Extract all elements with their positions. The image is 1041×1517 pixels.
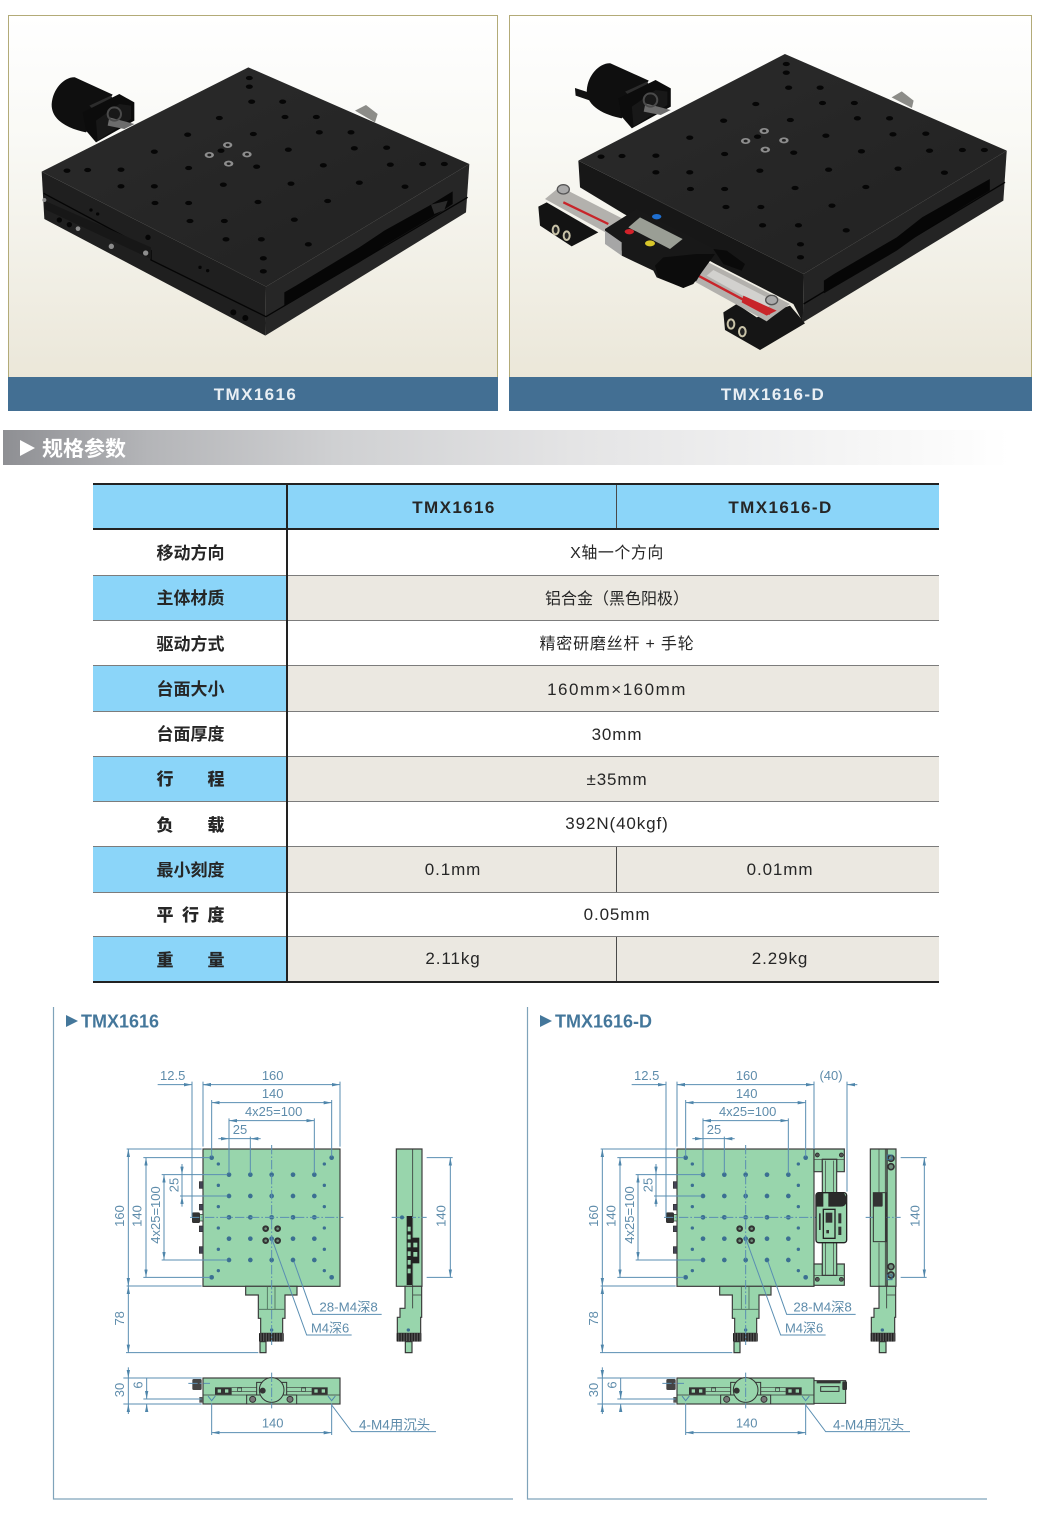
row: 最小刻度: 0.1mm (425, 860, 481, 879)
row: 台面厚度: 30mm (592, 725, 642, 744)
technical drawing: TMX1616: 6 (130, 1381, 145, 1389)
row: 最小刻度: 最小刻度 (156, 861, 224, 880)
technical drawing: TMX1616-D: 160 (586, 1205, 601, 1227)
technical drawing: TMX1616-D: (40) (819, 1068, 843, 1083)
row: 最小刻度 (93, 847, 939, 892)
spec table (93, 483, 939, 983)
technical drawing: TMX1616-D: 4-M4用沉头 (833, 1418, 904, 1433)
row: 行程 (93, 756, 939, 802)
technical drawing: TMX1616-D: 25 (640, 1178, 655, 1192)
row: 重量: 2.29kg (752, 948, 808, 968)
technical drawing: TMX1616-D (586, 1068, 927, 1435)
caption: TMX1616-D (509, 377, 1032, 411)
row: 行程: 程 (208, 770, 224, 789)
row: 行程: 行 (156, 770, 174, 789)
row: 重量: 量 (208, 950, 224, 970)
technical drawing: TMX1616: 25 (233, 1122, 247, 1137)
product illustration: TMX1616 stage (42, 67, 470, 336)
row: 平行度 (93, 892, 939, 937)
technical drawing: TMX1616-D: 30 (586, 1383, 601, 1397)
row: 台面大小: 台面大小 (156, 680, 224, 699)
row: 主体材质: 铝合金（黑色阳极） (545, 591, 689, 608)
heading: TMX1616-D: TMX1616-D (555, 1012, 652, 1032)
row: 台面大小: 160mm×160mm (547, 680, 687, 699)
panel: TMX1616-D dimension drawing (526, 1007, 987, 1500)
caption: TMX1616: TMX1616 (214, 385, 297, 404)
technical drawing: TMX1616: 140 (262, 1086, 284, 1101)
technical drawing: TMX1616: 78 (112, 1311, 127, 1326)
row: 平行度: 行 (182, 906, 199, 925)
row: 台面厚度 (93, 712, 939, 756)
technical drawing: TMX1616: 140 (262, 1416, 284, 1431)
row: 重量: 2.11kg (425, 948, 481, 968)
row: 负载: 392N(40kgf) (565, 814, 669, 832)
table header: TMX1616-D (728, 498, 833, 517)
technical drawing: TMX1616-D: 28-M4深8 (793, 1300, 852, 1315)
table header (93, 483, 939, 530)
row: 负载 (93, 802, 939, 847)
technical drawing: TMX1616-D: 6 (604, 1381, 619, 1389)
row: 驱动方式: 驱动方式 (156, 634, 224, 654)
row: 台面厚度: 台面厚度 (156, 725, 224, 744)
technical drawing: TMX1616: 140 (130, 1205, 145, 1227)
row: 平行度: 0.05mm (584, 905, 650, 924)
technical drawing: TMX1616: 4-M4用沉头 (359, 1418, 430, 1433)
technical drawing: TMX1616: 12.5 (160, 1068, 185, 1083)
technical drawing: TMX1616-D: M4深6 (785, 1321, 823, 1336)
row: 移动方向 (93, 530, 939, 576)
row: 负载: 载 (208, 816, 224, 834)
technical drawing: TMX1616: 160 (112, 1205, 127, 1227)
row: 主体材质: 主体材质 (156, 589, 224, 608)
row: 行程: ±35mm (586, 770, 648, 789)
row: 平行度: 平 (156, 906, 174, 925)
technical drawing: TMX1616-D: 12.5 (634, 1068, 659, 1083)
technical drawing: TMX1616: M4深6 (311, 1321, 349, 1336)
row: 重量 (93, 937, 939, 983)
row: 驱动方式: 精密研磨丝杆 + 手轮 (539, 636, 695, 653)
technical drawing: TMX1616-D: 4x25=100 (622, 1186, 637, 1244)
technical drawing: TMX1616: 30 (112, 1383, 127, 1397)
row: 移动方向: X轴一个方向 (570, 545, 664, 562)
technical drawing: TMX1616-D: 160 (736, 1068, 758, 1083)
section heading: 规格参数 (3, 430, 1041, 465)
row: 重量: 重 (156, 950, 174, 970)
technical drawing: TMX1616-D: 140 (736, 1416, 758, 1431)
row: 驱动方式 (93, 621, 939, 666)
technical drawing: TMX1616-D: 78 (586, 1311, 601, 1326)
technical drawing: TMX1616: 140 (434, 1205, 449, 1227)
technical drawing: TMX1616: 28-M4深8 (319, 1300, 378, 1315)
technical drawing: TMX1616 (112, 1068, 453, 1435)
technical drawing: TMX1616-D: 140 (908, 1205, 923, 1227)
row: 主体材质 (93, 576, 939, 621)
table header: TMX1616 (412, 498, 496, 517)
panel: product photo TMX1616 (8, 15, 498, 377)
row: 最小刻度: 0.01mm (747, 860, 813, 879)
technical drawing: TMX1616-D: 4x25=100 (719, 1104, 776, 1119)
row: 台面大小 (93, 666, 939, 712)
technical drawing: TMX1616: 4x25=100 (148, 1186, 163, 1244)
technical drawing: TMX1616: 4x25=100 (245, 1104, 302, 1119)
technical drawing: TMX1616-D: 25 (707, 1122, 721, 1137)
technical drawing: TMX1616-D: 140 (604, 1205, 619, 1227)
caption: TMX1616-D: TMX1616-D (721, 385, 825, 404)
technical drawing: TMX1616: 25 (166, 1178, 181, 1192)
panel: product photo TMX1616-D (509, 15, 1032, 377)
panel: TMX1616 dimension drawing (52, 1007, 513, 1500)
row: 负载: 负 (156, 816, 174, 834)
technical drawing: TMX1616: 160 (262, 1068, 284, 1083)
row: 平行度: 度 (208, 906, 224, 925)
heading: TMX1616: TMX1616 (81, 1012, 159, 1032)
section heading: 规格参数: 规格参数 (42, 438, 126, 461)
product illustration: TMX1616-D stage with digital gauge (538, 54, 1007, 350)
caption: TMX1616 (8, 377, 498, 411)
row: 移动方向: 移动方向 (156, 544, 224, 563)
technical drawing: TMX1616-D: 140 (736, 1086, 758, 1101)
